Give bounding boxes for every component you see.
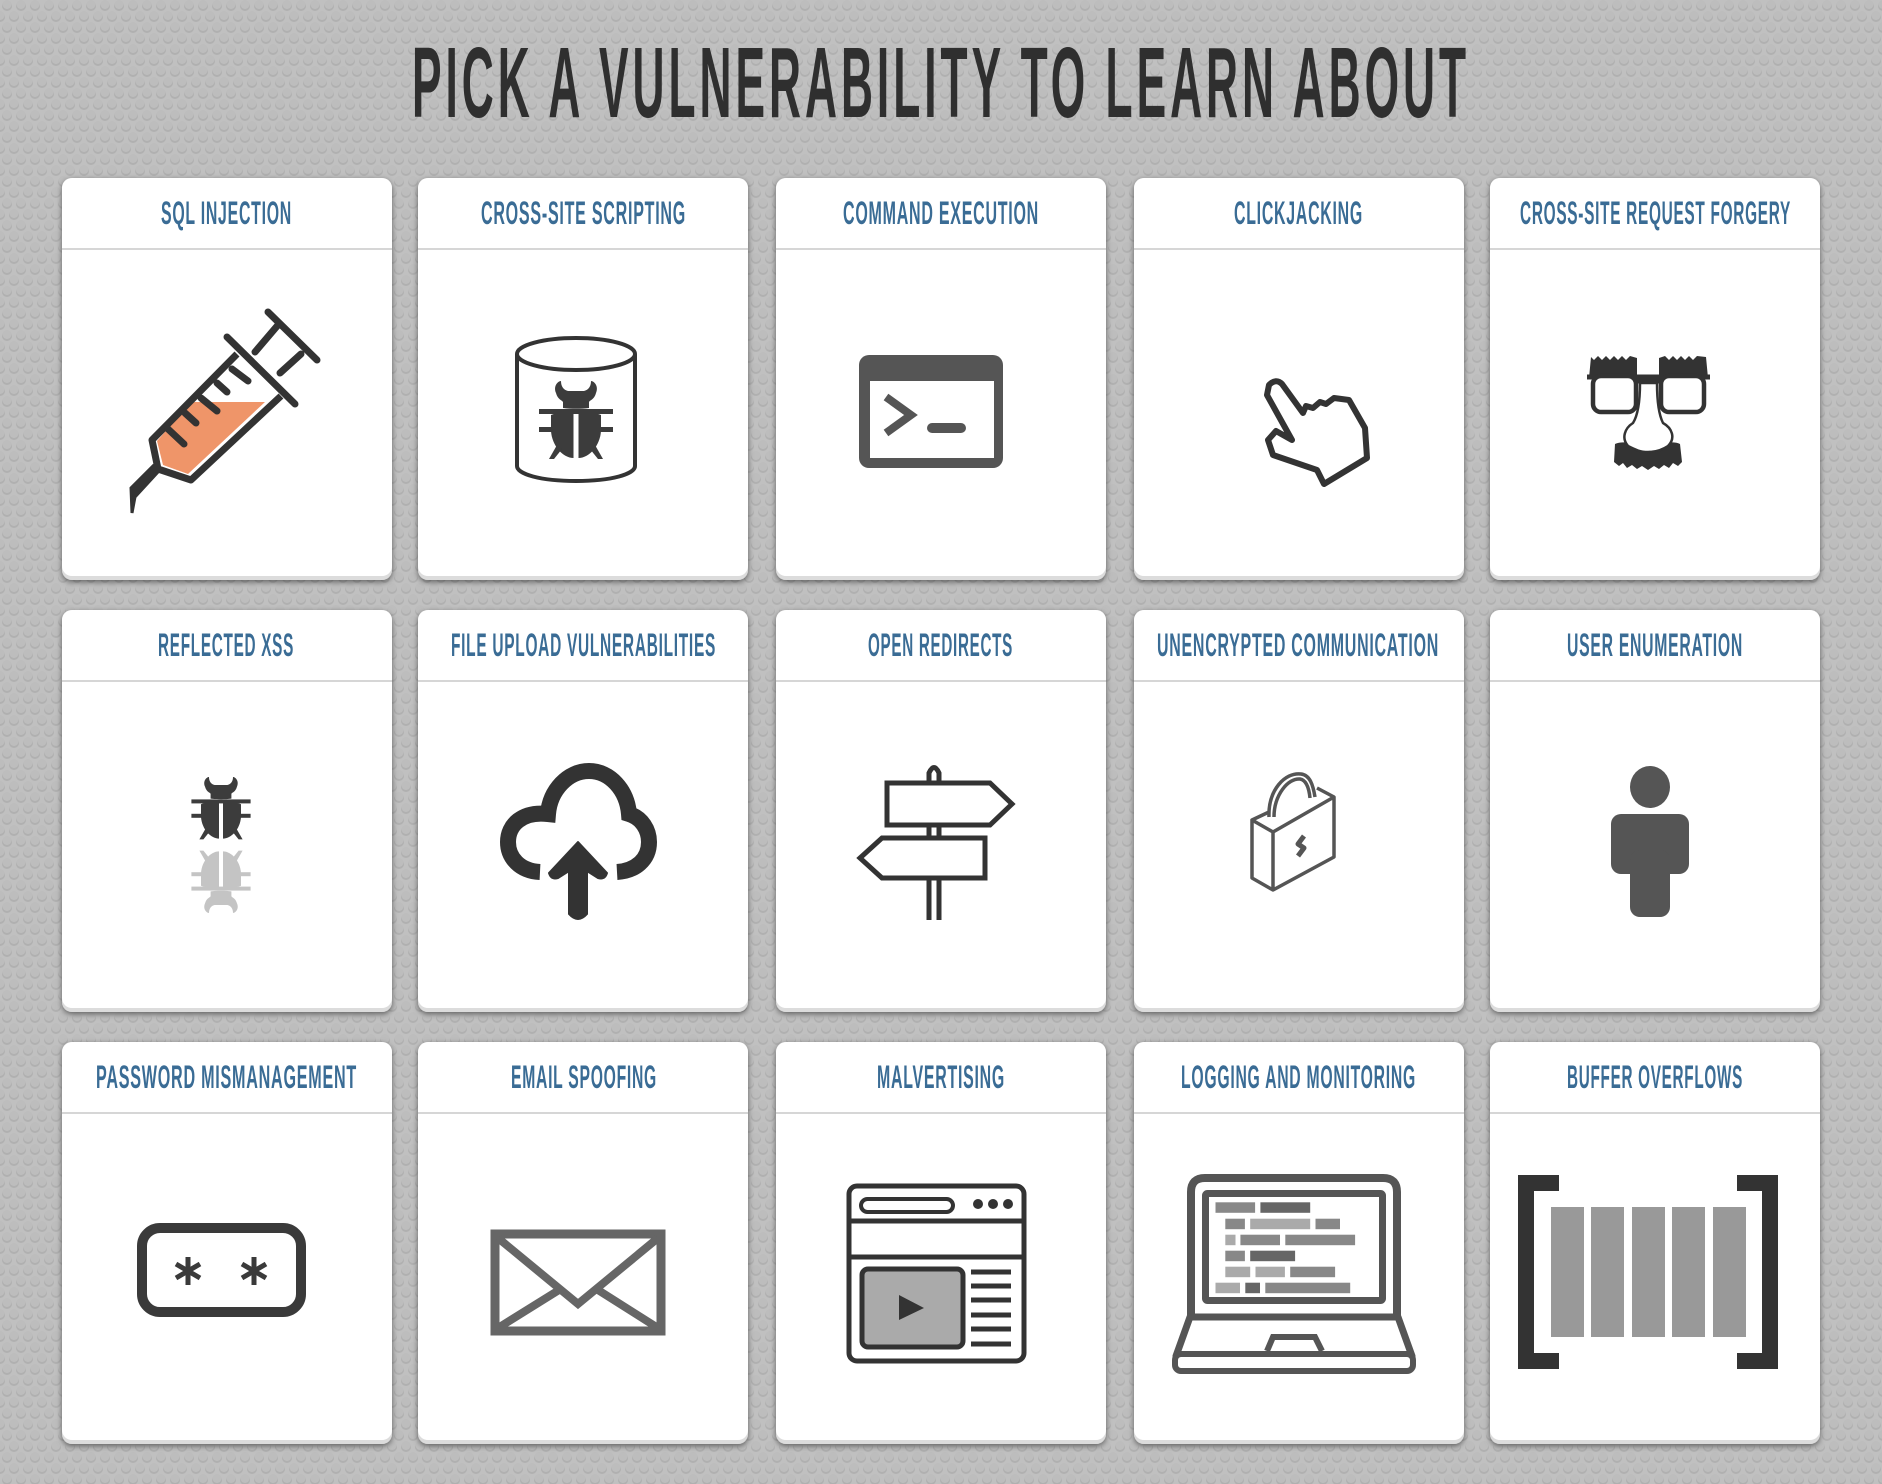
panel: email spoofing: EMAIL SPOOFING: [511, 1059, 657, 1095]
panel: password mismanagement: [62, 1042, 392, 1444]
panel: file upload vulnerabilities: FILE UPLOAD VULNERABILITIES: [451, 627, 716, 663]
panel: logging and monitoring: LOGGING AND MONITORING: [1181, 1059, 1416, 1095]
icon: cloud upload: [508, 771, 649, 919]
icon: bracketed buffer bars: [1518, 1175, 1778, 1369]
icon: disguise glasses: [1587, 356, 1710, 470]
icon: envelope: [495, 1234, 661, 1331]
panel: SQL injection: [62, 178, 392, 580]
panel: reflected XSS: [62, 610, 392, 1012]
panel: malvertising: [776, 1042, 1106, 1444]
icon: bug in database: [517, 338, 635, 481]
icon: person: [1611, 766, 1689, 917]
panel: cross-site request forgery: [1490, 178, 1820, 580]
panel: clickjacking: CLICKJACKING: [1234, 195, 1363, 231]
heading: cross-site scripting: CROSS-SITE SCRIPTING: [481, 195, 686, 231]
panel: cross-site scripting: [418, 178, 748, 580]
panel: logging and monitoring: [1134, 1042, 1464, 1444]
panel: email spoofing: [418, 1042, 748, 1444]
panel: file upload vulnerabilities: [418, 610, 748, 1012]
panel: SQL injection: SQL INJECTION: [161, 195, 292, 231]
panel: malvertising: MALVERTISING: [877, 1059, 1005, 1095]
panel: open redirects: [776, 610, 1106, 1012]
panel: open redirects: OPEN REDIRECTS: [868, 627, 1013, 663]
icon: pointing hand: [1267, 381, 1367, 484]
icon: bug with reflection: [191, 777, 251, 913]
panel: command execution: [776, 178, 1106, 580]
heading: password mismanagement: PASSWORD MISMANAGEMENT: [96, 1059, 357, 1095]
panel: buffer overflows: [1490, 1042, 1820, 1444]
icon: padlock: [1252, 774, 1334, 890]
icon: password field: [142, 1228, 301, 1312]
icon: terminal window: [859, 355, 1003, 468]
icon: browser window with video: [849, 1186, 1024, 1361]
panel: user enumeration: [1490, 610, 1820, 1012]
icon: signpost: [860, 768, 1012, 920]
icon: syringe: [131, 312, 317, 513]
panel: reflected XSS: REFLECTED XSS: [158, 627, 294, 663]
panel: unencrypted communication: [1134, 610, 1464, 1012]
panel: unencrypted communication: UNENCRYPTED COMMUNICATION: [1157, 627, 1439, 663]
panel: clickjacking: [1134, 178, 1464, 580]
icon: laptop with log lines: [1175, 1178, 1413, 1371]
heading: command execution: COMMAND EXECUTION: [843, 195, 1039, 231]
